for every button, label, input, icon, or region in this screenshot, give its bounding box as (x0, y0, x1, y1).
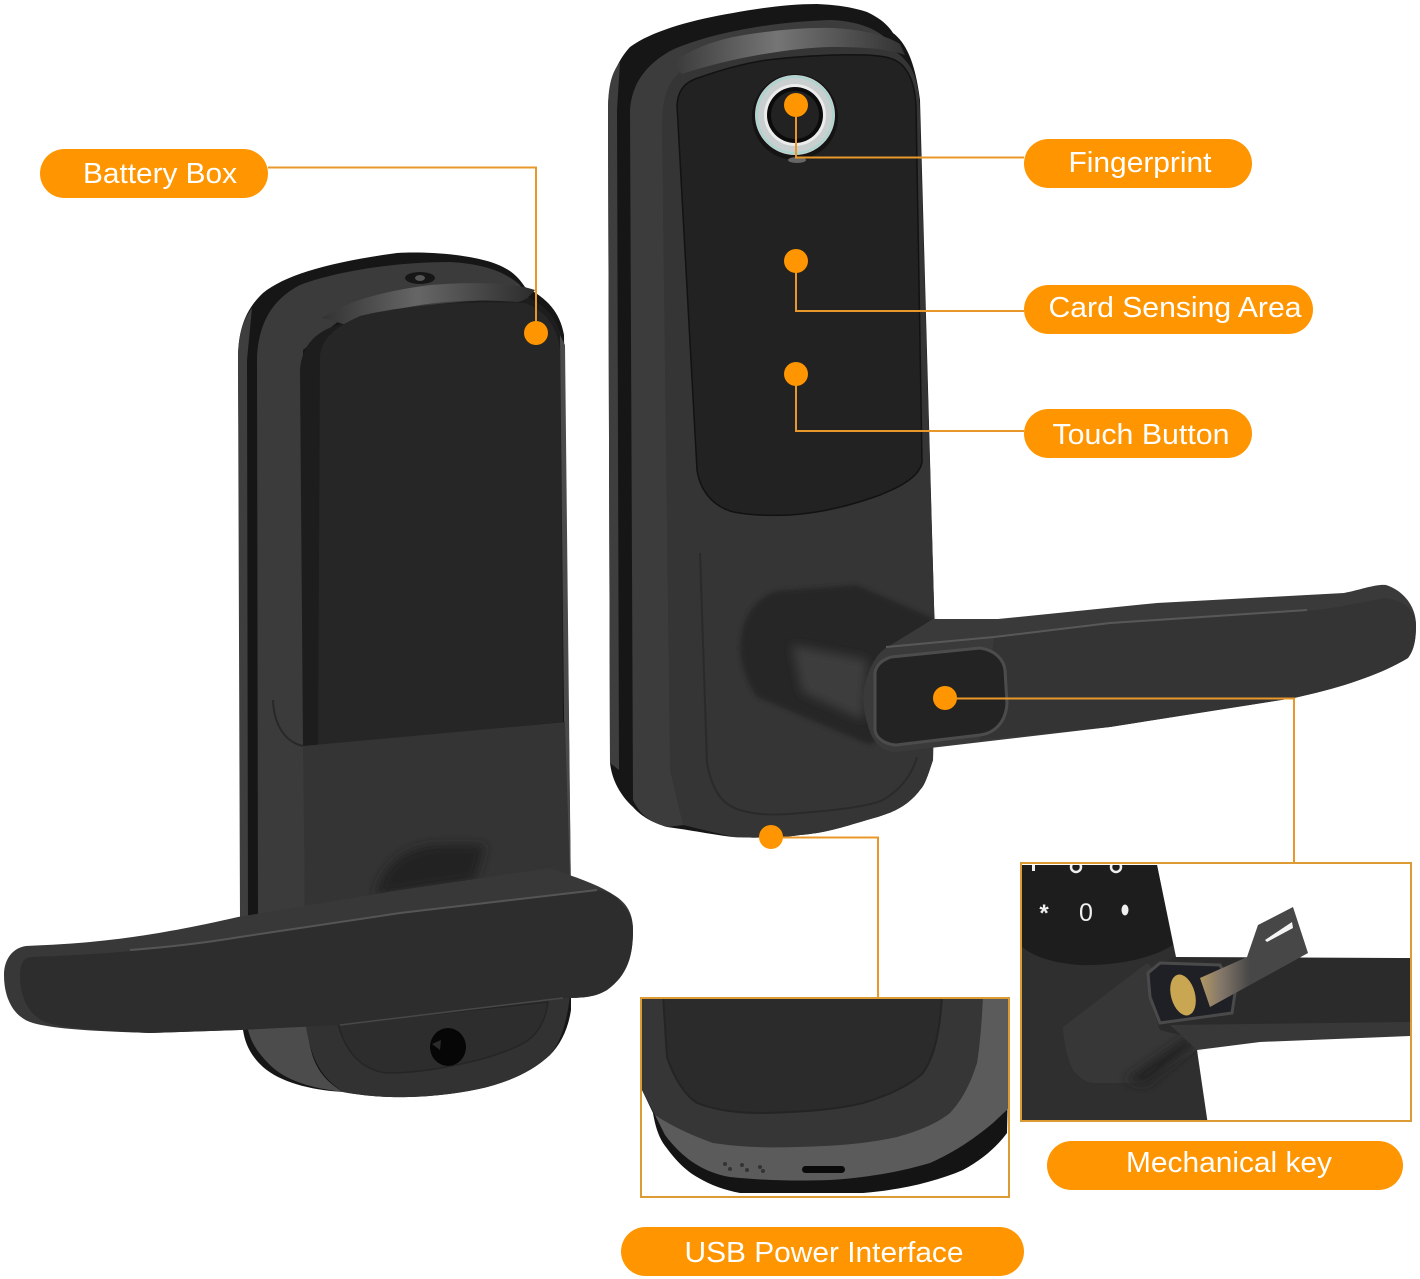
inset shadow rim (642, 995, 1010, 1193)
handle neck (740, 585, 940, 745)
left lower cap (305, 995, 570, 1097)
inset faceplate (642, 995, 983, 1147)
right lock silhouette (608, 4, 935, 838)
inset handle (1150, 957, 1410, 1040)
line: mechanical key (945, 698, 1294, 863)
top highlight band (672, 28, 905, 74)
label: Mechanical key: Mechanical key (1126, 1147, 1333, 1179)
inset panel: USB port (641, 995, 1010, 1197)
label: USB Power Interface: USB Power Interface (684, 1237, 964, 1269)
screw hole on top (405, 272, 435, 284)
inset gray underside (655, 995, 1010, 1181)
handle end cap (875, 648, 1007, 745)
key cylinder gold (1170, 974, 1196, 1016)
right lock: front view (608, 4, 1416, 838)
inset keypad digits: 0 (1079, 899, 1093, 927)
fingerprint reader (752, 74, 838, 163)
battery box cover (318, 302, 563, 745)
inset cylinder recess (1148, 963, 1235, 1023)
inset plate (1020, 860, 1208, 1125)
right faceplate (662, 42, 935, 838)
left cap inner outline (338, 1002, 548, 1073)
left handle face (20, 890, 633, 1033)
top highlight band (322, 283, 535, 325)
right handle face (980, 598, 1416, 740)
neck shadow (375, 845, 485, 895)
faceplate lower inset outline (700, 553, 917, 815)
line: battery box (268, 168, 536, 333)
line: touch button (796, 374, 1024, 431)
left handle lower highlight (340, 998, 563, 1025)
inset keypad digits (1032, 865, 1128, 921)
left handle (4, 868, 633, 1033)
line: USB power (771, 838, 878, 998)
label: Card Sensing Area (1024, 285, 1313, 334)
left handle highlight (130, 890, 597, 950)
keyhole (430, 1028, 466, 1066)
line: card sensing area (796, 261, 1024, 311)
cover lower curve (273, 700, 303, 746)
mechanical key body (1200, 907, 1308, 1007)
inset panel outline (663, 995, 942, 1113)
inset keypad digits: * (1039, 900, 1049, 927)
inset keypad area (1020, 860, 1173, 965)
USB slot (802, 1166, 845, 1173)
label: Fingerprint (1024, 139, 1252, 188)
right touch panel (677, 55, 922, 515)
right outer edge stripe (608, 62, 620, 770)
label: Touch Button: Touch Button (1052, 419, 1230, 451)
left dark panel edge (300, 298, 563, 746)
lower plate (303, 722, 570, 910)
line: fingerprint (796, 105, 1024, 158)
right edge stripe (560, 335, 571, 900)
speaker dots (723, 1162, 765, 1173)
label: Battery Box: Battery Box (83, 158, 238, 190)
label: USB Power Interface (621, 1227, 1024, 1276)
right side band (630, 20, 893, 827)
marker dots (524, 93, 957, 849)
left lock silhouette (238, 253, 571, 1097)
left side band (257, 262, 530, 925)
right handle (863, 585, 1416, 752)
label: Touch Button (1024, 409, 1252, 458)
label: Battery Box (40, 149, 268, 198)
left lock: back view (4, 253, 633, 1097)
label: Fingerprint: Fingerprint (1068, 147, 1212, 179)
inset neck (1197, 1050, 1198, 1051)
connector lines (268, 105, 1294, 998)
inset panel: mechanical key (1020, 860, 1411, 1125)
left outer edge stripe (238, 308, 252, 920)
right handle highlight (886, 610, 1307, 647)
label: Mechanical key (1047, 1141, 1403, 1190)
left cap gray side (247, 1025, 343, 1092)
label: Card Sensing Area: Card Sensing Area (1048, 292, 1302, 324)
